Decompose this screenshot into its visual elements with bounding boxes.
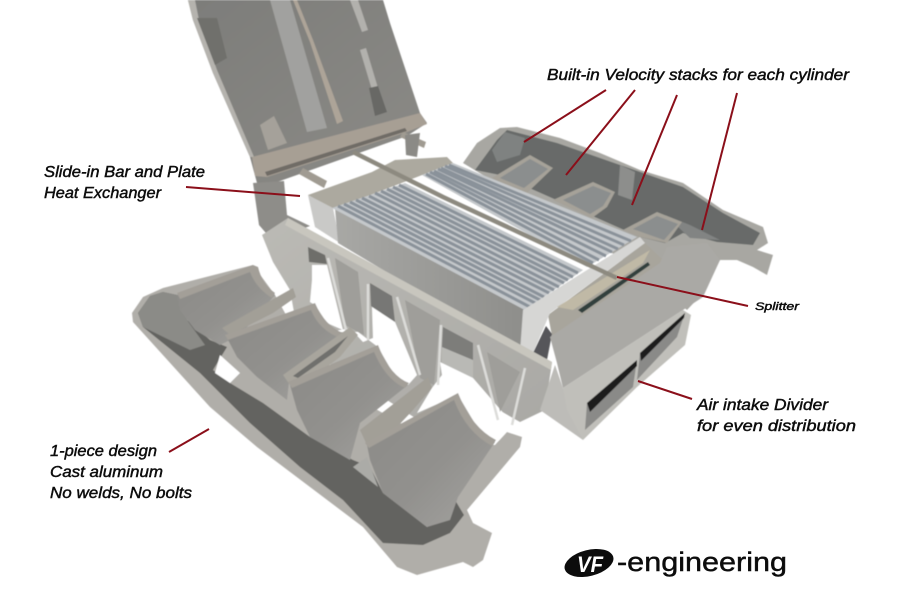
front stack 2 bbox=[225, 303, 343, 400]
logo badge: VF bbox=[577, 552, 604, 577]
label: heat exchanger: Slide-in Bar and Plate bbox=[44, 164, 205, 181]
front finger 2 bbox=[283, 327, 358, 385]
label: splitter: Splitter bbox=[755, 301, 801, 313]
label: one-piece design: Cast aluminum bbox=[50, 464, 163, 481]
intake opening left bbox=[585, 360, 637, 430]
logo wordmark: -engineering bbox=[617, 547, 787, 577]
manifold photo illustration bbox=[132, 0, 773, 575]
front half shell bbox=[132, 265, 522, 575]
heat exchanger bbox=[308, 152, 665, 365]
front fin core bbox=[332, 183, 583, 310]
label: velocity stacks: Built-in Velocity stacks for each cylinder bbox=[547, 67, 850, 84]
wall ribs bbox=[335, 258, 364, 335]
rear half shell bbox=[463, 127, 773, 310]
front finger 3 bbox=[360, 377, 432, 445]
wall window 2 bbox=[330, 283, 417, 385]
front finger 1 bbox=[222, 288, 296, 335]
ribbed centre wall bbox=[262, 218, 552, 442]
left stand bbox=[253, 181, 310, 240]
exchanger end cap bbox=[520, 237, 645, 353]
front stack 4 bbox=[365, 393, 496, 527]
air intake with divider bbox=[540, 310, 691, 440]
label: air intake divider: Air intake Divider bbox=[696, 397, 829, 414]
splitter leader bbox=[617, 277, 748, 306]
divider leader bbox=[638, 381, 692, 399]
label: air intake divider: for even distribution bbox=[697, 418, 856, 435]
front stack 3 bbox=[288, 345, 409, 460]
callout lines bbox=[169, 90, 748, 452]
exchanger end frame bbox=[548, 243, 665, 336]
label: one-piece design: No welds, No bolts bbox=[50, 485, 192, 502]
intake opening right bbox=[637, 313, 685, 380]
rear fin core bbox=[422, 163, 637, 267]
wall window 3 bbox=[417, 327, 518, 442]
front stack 1 bbox=[177, 265, 275, 345]
logo badge bbox=[562, 544, 616, 582]
one-piece leader bbox=[169, 429, 209, 452]
label: heat exchanger bbox=[44, 164, 205, 202]
label: air intake divider bbox=[696, 397, 856, 435]
velocity stack leaders bbox=[524, 90, 737, 230]
logo bbox=[562, 544, 787, 582]
heat exchanger leader bbox=[186, 187, 300, 196]
wall window 1 bbox=[308, 247, 343, 330]
top half shell raised bbox=[188, 0, 427, 188]
label: heat exchanger: Heat Exchanger bbox=[44, 185, 162, 202]
prong bars bbox=[299, 168, 327, 188]
label: one-piece design bbox=[50, 443, 192, 502]
right end panel bbox=[550, 243, 720, 388]
splitter bar bbox=[353, 152, 617, 278]
rear velocity stacks bbox=[492, 155, 682, 243]
trough hole bbox=[215, 355, 240, 383]
label: one-piece design: 1-piece design bbox=[50, 443, 157, 460]
